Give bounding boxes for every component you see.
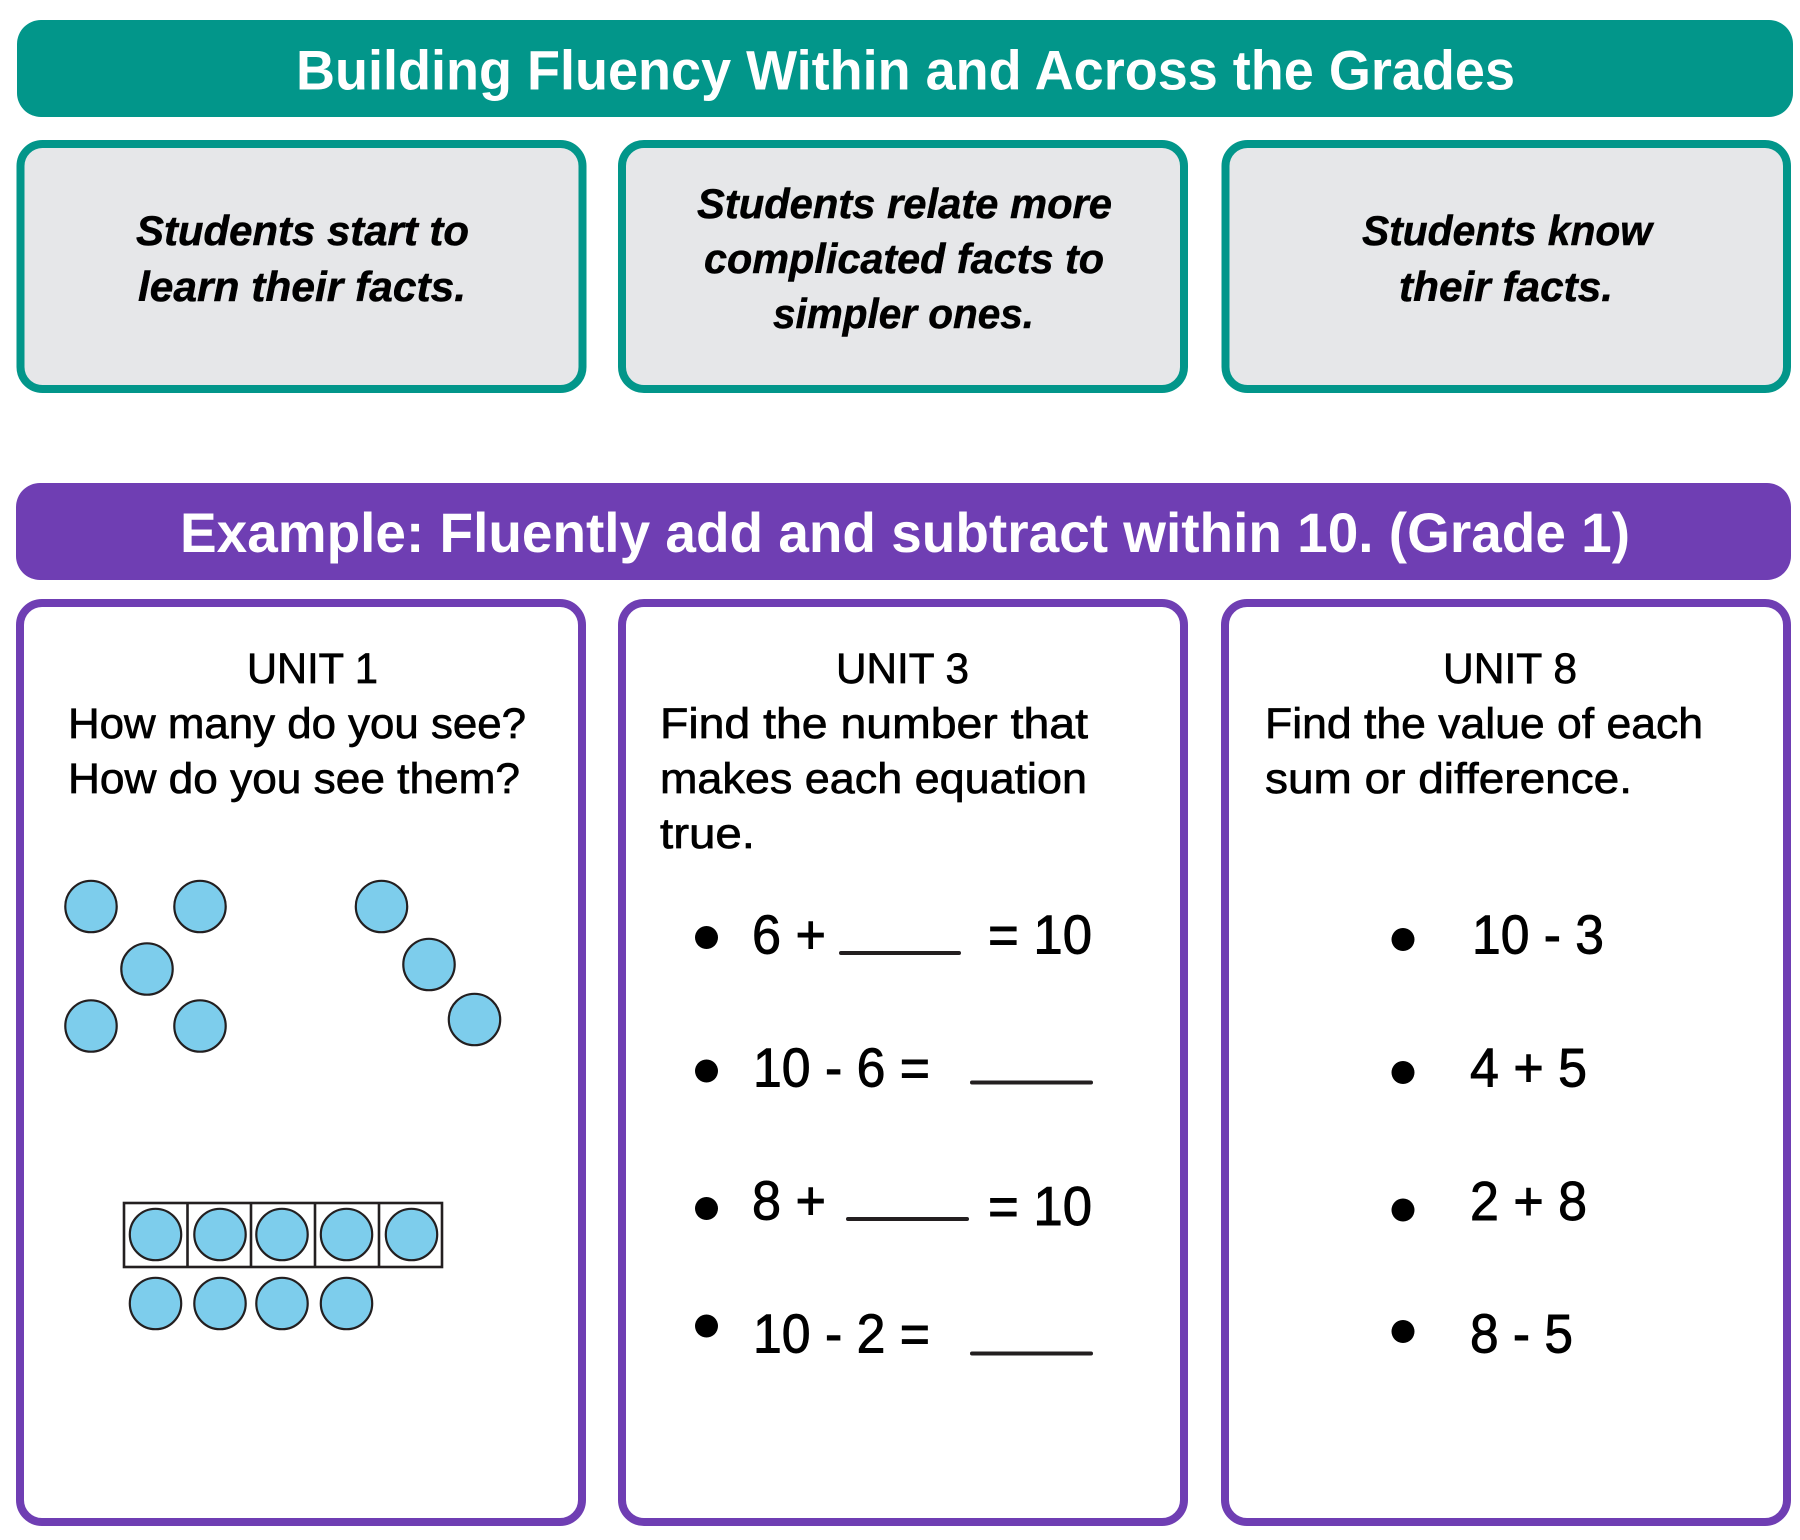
expression: 10 - 3: 10 - 3 [1472,904,1604,966]
dot group: three dots [356,881,500,1045]
panel text: Students relate more [697,180,1112,227]
unit 8 prompt: sum or difference. [1265,755,1632,803]
panel text: learn their facts. [138,263,466,310]
equation: 8 + blank = 10: 8 + [752,1170,826,1232]
unit 8 prompt [1265,700,1703,803]
panel: unit 3 [622,603,1184,1522]
equation: 8 + blank = 10 [695,1170,1092,1237]
equation: 8 + blank = 10: = 10 [988,1175,1092,1237]
unit 1 prompt: How do you see them? [68,755,520,803]
panel text: simpler ones. [773,290,1034,337]
expression: 10 - 3 [1392,904,1604,966]
unit 8 heading: UNIT 8 [1443,645,1577,693]
dot group: five dots [65,881,226,1052]
expression: 4 + 5: 4 + 5 [1470,1036,1587,1098]
five frame with dots [124,1203,442,1267]
equation: 10 - 2 = blank: 10 - 2 = [753,1302,930,1364]
example heading text: Example: Fluently add and subtract within 10. (Grade 1) [180,501,1630,564]
title banner [17,20,1793,117]
unit 3 heading: UNIT 3 [836,645,969,693]
panel text: complicated facts to [704,235,1104,282]
panel: students know facts [1226,144,1787,389]
row of four dots [130,1278,372,1329]
panel: students start to learn [20,144,582,389]
equation: 10 - 2 = blank [695,1302,1091,1364]
expression: 2 + 8: 2 + 8 [1470,1170,1587,1232]
example banner [16,483,1791,580]
unit 1 prompt: How many do you see? [68,700,526,748]
panel text: their facts. [1399,263,1613,310]
title text: Building Fluency Within and Across the Grades [296,38,1515,102]
panel text [697,180,1112,337]
unit 1 heading: UNIT 1 [247,645,378,693]
panel text [136,207,469,310]
panel: students relate facts [622,144,1184,389]
unit 3 prompt: true. [660,810,755,858]
expression: 2 + 8 [1392,1170,1587,1232]
panel: unit 1 [20,603,582,1522]
equation: 6 + blank = 10 [695,904,1092,966]
expression: 4 + 5 [1392,1036,1587,1098]
unit 1 prompt [68,700,526,803]
unit 8 prompt: Find the value of each [1265,700,1703,748]
panel text: Students start to [136,207,469,254]
equation: 6 + blank = 10: 6 + [752,904,826,966]
unit 3 prompt: makes each equation [660,755,1087,803]
equation: 10 - 6 = blank [695,1036,1091,1098]
panel text: Students know [1362,207,1654,254]
unit 3 prompt [660,700,1088,858]
equation: 10 - 6 = blank: 10 - 6 = [753,1036,930,1098]
unit 3 prompt: Find the number that [660,700,1088,748]
expression: 8 - 5: 8 - 5 [1470,1302,1573,1364]
expression: 8 - 5 [1392,1302,1573,1364]
equation: 6 + blank = 10: = 10 [988,904,1092,966]
panel: unit 8 [1225,603,1787,1522]
panel text [1362,207,1654,310]
